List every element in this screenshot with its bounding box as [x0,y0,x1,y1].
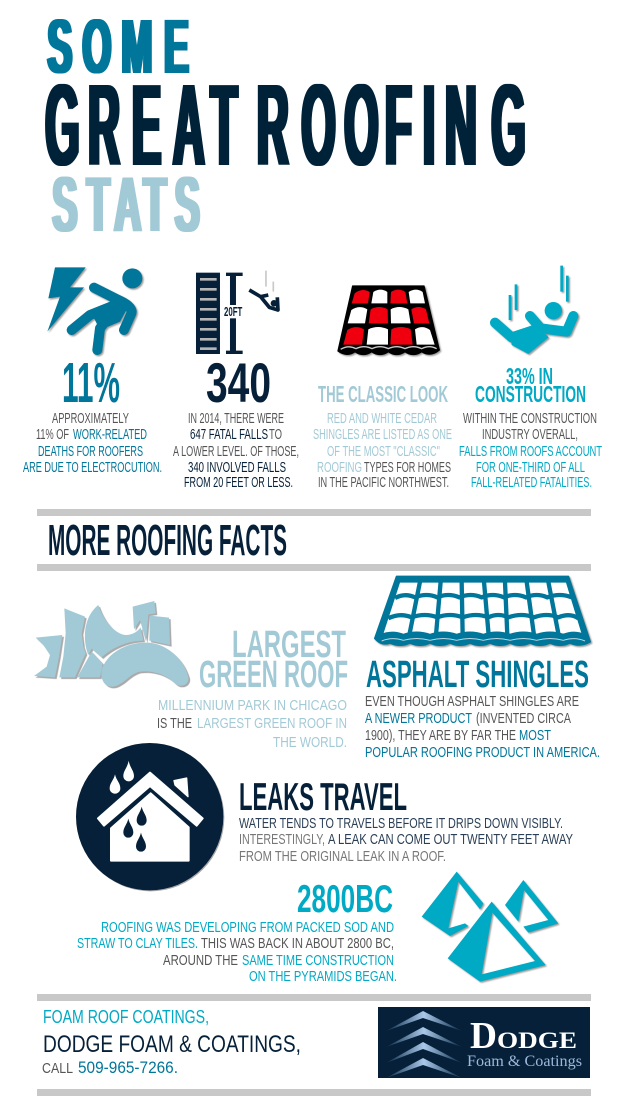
text: pyramids description [77,920,397,985]
text: classic look description: SHINGLES ARE LISTED AS ONE [313,427,452,443]
text: green roof description: LARGEST GREEN ROOF IN [197,716,347,732]
text: pyramids description: AROUND THE [163,953,238,969]
text: electrocution description: 11% OF [36,427,69,443]
text: green roof description [157,698,347,751]
text: classic look description: OF THE MOST "CLASSIC" [327,444,440,460]
panel: 2800 BC [77,872,558,985]
text: green roof description: THE WORLD. [273,735,347,751]
panel: leaks travel [76,743,573,891]
icon: shingle roof [375,577,590,645]
heading: largest green roof: LARGEST [232,624,346,666]
icon: red and white tile roof [338,286,439,354]
logo: Dodge Foam & Coatings: Foam & Coatings [467,1053,582,1070]
panel: contact: DODGE FOAM & COATINGS, [43,1031,301,1058]
text: electrocution description: WORK-RELATED [73,427,147,443]
text: asphalt description: (INVENTED CIRCA [476,711,571,727]
logo: Dodge Foam & Coatings [378,1007,590,1078]
title: STATS [52,161,200,248]
title: SOME [48,3,189,90]
panel: contact: FOAM ROOF COATINGS, [43,1006,209,1027]
text: falls description: 647 FATAL FALLS [190,427,268,443]
heading: 33% in construction: 33% IN [506,363,553,389]
heading: largest green roof [199,624,348,696]
text: electrocution description: APPROXIMATELY [52,411,129,427]
heading: the classic look: THE CLASSIC LOOK [318,381,448,407]
icon: falling person [495,266,573,354]
panel: asphalt shingles [365,577,600,761]
panel: contact [42,1006,301,1077]
text: falls description [173,411,299,491]
text: electrocution description: DEATHS FOR ROOFERS [38,444,143,460]
title [45,3,526,248]
heading: 2800BC: 2800BC [297,878,393,921]
text: classic look description: IN THE PACIFIC NORTHWEST. [318,475,449,491]
text: construction description [459,411,602,491]
text: classic look description: RED AND WHITE CEDAR [327,411,437,427]
text: classic look description [313,411,452,491]
text: leaks description [239,816,573,865]
text: electrocution description: ARE DUE TO ELECTROCUTION. [23,460,162,476]
text: green roof description: MILLENNIUM PARK IN CHICAGO [158,698,347,714]
icon: leaking house [76,743,224,891]
text: pyramids description: ON THE PYRAMIDS BEGAN. [249,969,397,985]
text: classic look description: ROOFING [317,460,362,476]
logo: Dodge Foam & Coatings: D [470,1015,497,1057]
text: pyramids description: SAME TIME CONSTRUCTION [242,953,394,969]
text: falls description: FROM 20 FEET OR LESS. [184,475,293,491]
text: leaks description: INTERESTINGLY, [239,832,325,848]
text: electrocution description [23,411,162,476]
stat: 340: 340 [206,351,271,414]
text: pyramids description: STRAW TO CLAY TILES. [77,936,198,952]
text: pyramids description: ROOFING WAS DEVELOPING FROM PACKED SOD AND [101,920,394,936]
text: asphalt description [365,694,600,761]
text: falls description: IN 2014, THERE WERE [188,411,284,427]
icon: twenty foot ladder and falling figure [196,271,278,354]
text: falls description: TO [269,427,282,443]
icon: millennium park skyline [34,601,189,687]
panel: contact: 509-965-7266. [78,1058,178,1077]
text: leaks description: FROM THE ORIGINAL LEAK IN A ROOF. [239,849,446,865]
text: asphalt description: 1900), THEY ARE BY FAR THE [365,728,516,744]
panel: construction stat [459,266,602,491]
heading: largest green roof: GREEN ROOF [199,654,348,696]
text: construction description: INDUSTRY OVERALL, [482,427,578,443]
panel: contact: CALL [42,1060,73,1077]
logo: Dodge Foam & Coatings: ODGE [497,1028,577,1053]
title: GREAT ROOFING [45,61,526,190]
icon: twenty foot ladder and falling figure: 20FT [224,305,242,319]
text: falls description: A LOWER LEVEL. OF THOSE, [173,444,299,460]
stat: 11%: 11% [62,351,120,415]
text: green roof description: IS THE [157,716,192,732]
text: classic look description: TYPES FOR HOMES [364,460,451,476]
panel: classic look [313,286,452,491]
heading: leaks travel: LEAKS TRAVEL [239,776,407,819]
panel: electrocution stat [23,267,162,476]
icon: electrocuted worker [47,267,142,350]
panel: falls stat [173,271,299,491]
text: asphalt description: A NEWER PRODUCT [365,711,472,727]
text: asphalt description: MOST [519,728,551,744]
text: MORE ROOFING FACTS [48,516,287,565]
icon: pyramids [422,872,558,982]
panel: largest green roof [34,601,348,751]
text: falls description: 340 INVOLVED FALLS [188,460,286,476]
text: pyramids description: THIS WAS BACK IN ABOUT 2800 BC, [201,936,394,952]
heading: 33% in construction [475,363,586,407]
